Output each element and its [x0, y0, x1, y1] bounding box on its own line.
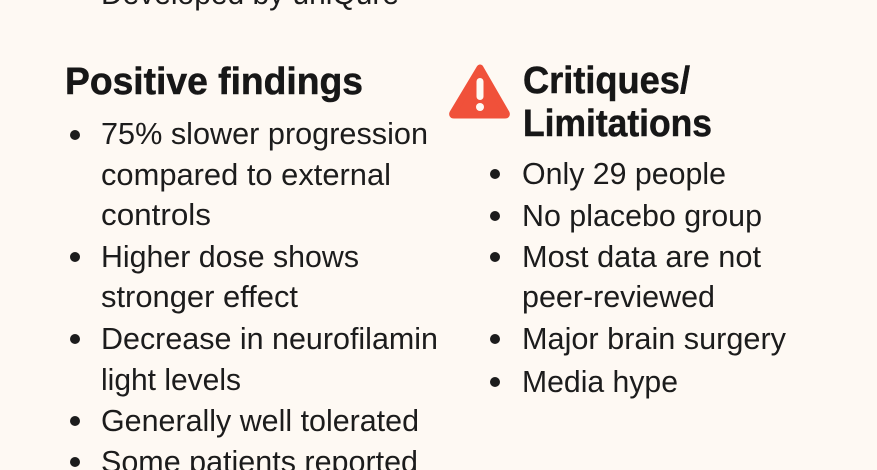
bullet list: positive findings: light levels [101, 362, 241, 397]
bullet list: positive findings: Generally well tolerated [101, 403, 419, 438]
bullet list: positive findings: controls [101, 197, 211, 232]
icon: warning triangle [453, 68, 506, 115]
bullet list: critiques [490, 156, 786, 399]
panel: positive findings [65, 61, 438, 470]
bullet list: critiques: Major brain surgery [522, 321, 786, 356]
bullet list: positive findings: Higher dose shows [101, 239, 359, 274]
bullet list: critiques: No placebo group [522, 198, 762, 233]
heading: critiques and limitations: Limitations [523, 103, 712, 145]
bullet list: positive findings: compared to external [101, 157, 391, 192]
panel: critiques and limitations [453, 60, 786, 399]
heading: positive findings: Positive findings [65, 61, 363, 103]
bullet list: positive findings: 75% slower progression [101, 116, 428, 151]
bullet list: positive findings [70, 116, 438, 470]
bullet list: positive findings: stronger effect [101, 279, 298, 314]
heading: critiques and limitations: Critiques/ [523, 60, 690, 102]
bullet list: critiques: Media hype [522, 364, 678, 399]
heading: critiques and limitations [523, 60, 712, 145]
bullet list: critiques: peer-reviewed [522, 279, 715, 314]
bullet list: critiques: Most data are not [522, 239, 761, 274]
bullet list: critiques: Only 29 people [522, 156, 726, 191]
bullet list: positive findings: Decrease in neurofilamin [101, 321, 438, 356]
